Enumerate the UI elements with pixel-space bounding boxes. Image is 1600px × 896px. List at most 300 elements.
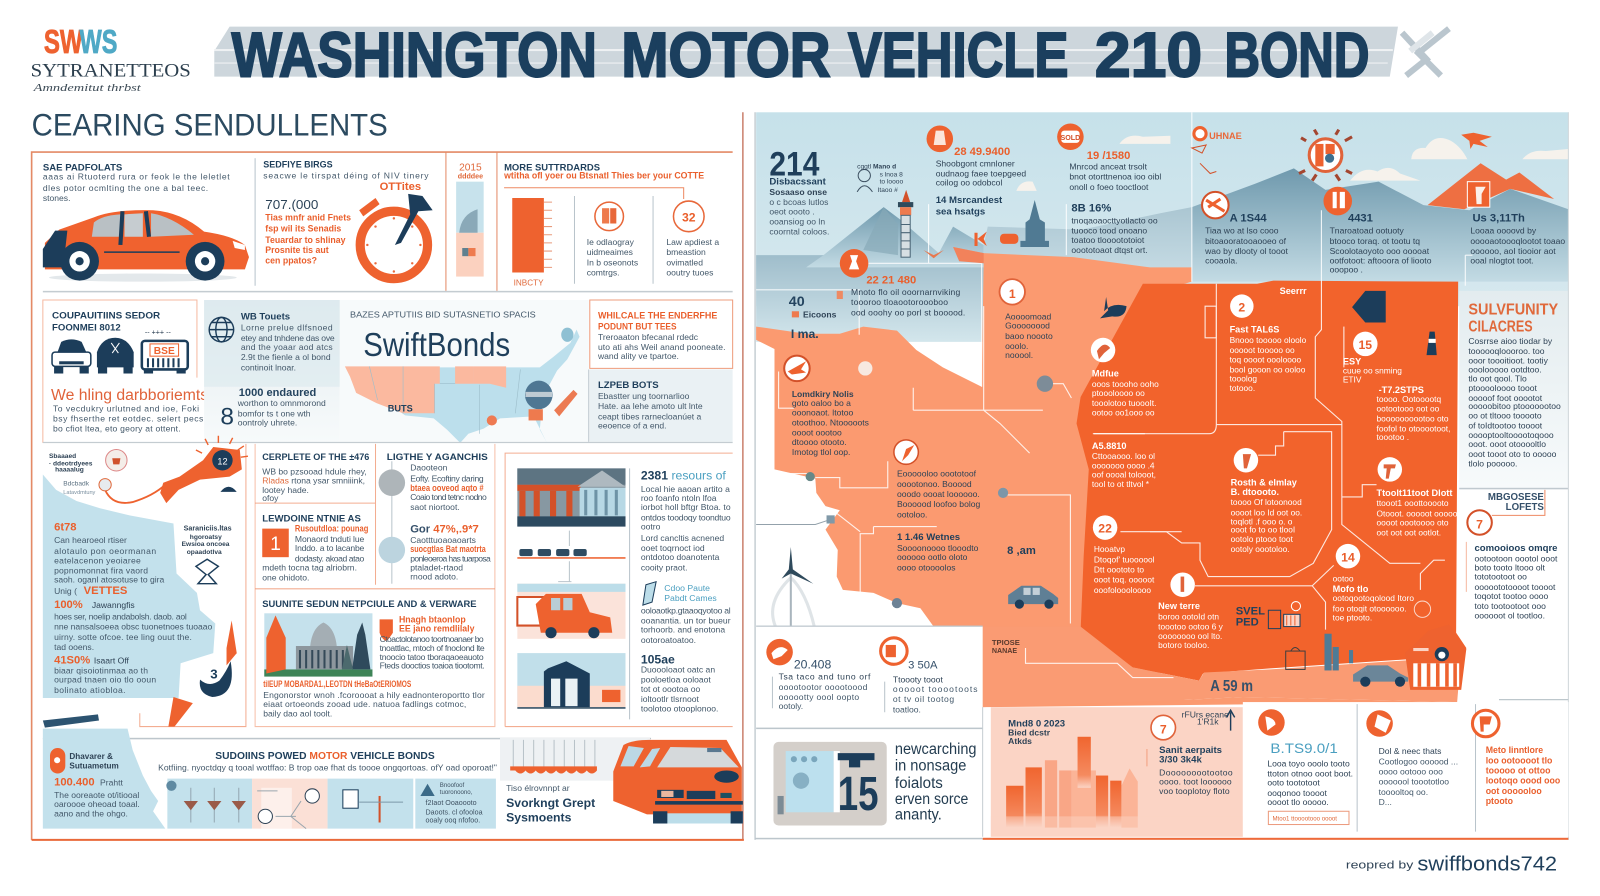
panel: 15 research: foialots — [895, 775, 943, 792]
stat: 214 — [769, 146, 829, 237]
icon: awning — [510, 766, 597, 774]
panel: suddenly powered bonds: The ooreaote ot/itiooal — [54, 790, 139, 800]
marker 22: ooot toq. ooooot — [1094, 575, 1155, 585]
panel: right sidebar sustainability — [1459, 291, 1568, 489]
marker: white note: ptoooloooo oo — [1092, 388, 1145, 398]
stat: blue value: ooto toototoot — [1267, 778, 1320, 788]
panel: SwiftBonds US map: BUTS — [388, 403, 413, 413]
title banner: VEHICLE — [848, 21, 1068, 91]
panel: complete of the time: CERPLETE OF THE ±476 — [262, 452, 369, 463]
clouds — [1016, 136, 1568, 191]
panel: web touts — [204, 300, 340, 442]
icon: chevrons — [1402, 29, 1449, 76]
stat: 4431: Scoolotaoyoto ooo ooooat — [1330, 246, 1430, 256]
panel: right sidebar sustainability: ooooof foot ooootot — [1468, 393, 1543, 403]
stat: 28 49.9400: 28 49.9400 — [954, 146, 1010, 158]
panel: coastal journey: ourpad tnaen oio tlo ooun — [54, 675, 156, 685]
panel: SwiftBonds US map: BAZES APTUTIIS BID SUTASNETIO SPACIS — [350, 309, 536, 319]
panel: 15 research: ananty. — [895, 806, 942, 823]
panel: expert bots: ceapt tibes rarnecloanúet a — [598, 411, 701, 421]
panel: coastal journey: hgoroatsy — [190, 534, 222, 541]
panel: coastal journey: bolinato atiobloa. — [54, 685, 126, 695]
panel: message lofts: toqotot tootoo oooo — [1474, 591, 1549, 601]
panel: web touts: worthon to omnmorond — [237, 398, 326, 408]
panel: web touts: 2.9t the fienle a ol bond — [241, 352, 331, 362]
icon: navy tag — [1352, 291, 1386, 322]
panel: service bridges with timer: cen ppatos? — [265, 255, 317, 265]
stat: 40: 40 — [789, 294, 805, 310]
panel: web touts: and the yoaar aod atcs — [241, 342, 333, 352]
panel: coupon sector: To vecdukry urlutned and ioe, Foki — [53, 403, 199, 413]
panel: coastal journey: haaaalug — [55, 466, 84, 473]
icon: navy shape — [1100, 297, 1127, 318]
panel: summit capitol — [262, 599, 485, 718]
marker 14: Mofo tlo — [1333, 584, 1369, 594]
stat: 40 — [789, 291, 843, 341]
panel: more standards: ovimatled — [666, 257, 703, 267]
panel: message lofts: oooooot ol tootloo. — [1474, 610, 1545, 620]
marker 22: Hooatvp — [1094, 544, 1125, 554]
panel: coastal journey: Saraniciis.ltas — [184, 525, 232, 533]
stat: 28 49.9400 — [927, 126, 1026, 217]
stat: 214: o c bcoas lutlos — [769, 197, 828, 207]
panel: expert bots: eeoence of a end. — [598, 421, 667, 431]
panel: service bridges with timer: 707.(000 — [265, 197, 318, 212]
marker: health: ootoly oootoloo. — [1231, 544, 1290, 554]
icon: bus — [142, 329, 188, 374]
panel: right sidebar sustainability: of toIdtootoo toooot — [1468, 421, 1543, 431]
panel: coastal journey: uirny. sotte ofcoe. tee ling ouut the. — [54, 632, 192, 642]
panel: coastal journey: Bdcbadk — [63, 481, 90, 488]
marker 22: Dtoqof' tuoooool — [1094, 554, 1155, 564]
panel: coupon sector: FOONMEI 8012 — [52, 323, 121, 334]
icon: 32 circle: 32 — [682, 210, 696, 224]
label: tpose — [992, 638, 1173, 678]
panel: message lofts: MBGOSESE — [1488, 492, 1544, 503]
stat: 28 49.9400: oudnaog faee toepgeed — [936, 169, 1026, 179]
panel: small stats: Tsa taco and tuno orf — [779, 672, 871, 682]
panel: lewdoine notes: Rusoutdloa: pounag — [295, 524, 368, 534]
panel: coastal journey: Sbaaaed — [49, 453, 76, 460]
left panel frame — [32, 112, 744, 840]
logo: SW — [44, 24, 83, 61]
marker 15: ootootooo oot oo — [1377, 403, 1440, 413]
panel: 2381 resources: ooloaotkp.gtaaoqyotoo al — [641, 605, 731, 615]
stat: 28 49.9400: sea hsatgs — [936, 206, 985, 217]
stat: 1 1.46 — [897, 532, 979, 572]
stat: meta limit: lootoqo oood ooo — [1486, 776, 1561, 786]
stat: 214: coorntal coloos. — [769, 227, 829, 237]
icon: person with label: cggtl Mano d — [857, 163, 896, 170]
stat: 22 21 480: 22 21 480 — [866, 275, 916, 287]
panel: suddenly powered bonds: Dhavarer & — [69, 752, 113, 761]
marker: peach plane: otoothoo. Ntooooots — [792, 418, 869, 428]
stat: deal needs: Dol & neec thats — [1379, 746, 1441, 756]
stat: 19 1580: 8B 16% — [1071, 202, 1111, 214]
panel: skyline: 3/30 3k4k — [1159, 754, 1202, 765]
panel: message lofts: toto tootootoot ooo — [1474, 601, 1546, 611]
panel: right sidebar sustainability: toooooqloooroo. too — [1468, 346, 1545, 356]
icon: hiker label: UHNAE — [1209, 131, 1242, 141]
infographic canvas: 8 ,am — [1007, 545, 1036, 557]
mountains — [756, 207, 984, 267]
panel: 2381 resources: cooity praot. — [641, 562, 687, 572]
marker: health: oooot loo Id oot oo. — [1231, 507, 1302, 517]
stat: deal needs: ooooool tooototloo — [1379, 777, 1449, 787]
stat: 214: Disbacssant — [769, 177, 827, 188]
panel: coastal journey: VETTES — [84, 585, 128, 597]
marker 1: nooool. — [1005, 350, 1033, 360]
panel: service bridges with timer: Prosnite tis aut — [265, 245, 329, 255]
stat: 214: oeot oooto . — [769, 206, 815, 216]
panel: lifetime advances: ptaladet-rtaod — [410, 562, 463, 572]
panel: small stats: 20.408 — [794, 657, 831, 671]
marker: tool: Otooot. ooooot ooooot — [1377, 508, 1460, 518]
marker 22: Dtt ooototo to — [1094, 564, 1144, 574]
panel: lifetime advances: LIGTHE Y AGANCHIS — [387, 452, 488, 463]
marker: peach plane: Lomdkiry Nolis — [792, 389, 854, 399]
panel: striking grant segments: Tiso élrovnnpt ar — [506, 783, 570, 793]
stat: blue value: Looa toyo ooolo tooto — [1267, 758, 1350, 768]
panel: skyline: Atkds — [1008, 736, 1032, 746]
footer credit: swiffbonds742 — [1417, 853, 1557, 875]
panel: summit capitol: SUUNITE SEDUN NETPCIULE AND & VERWARE — [262, 599, 477, 610]
panel: skyline: oooo. toot loooooo — [1159, 777, 1232, 787]
label: SVEL PED: PED — [1236, 617, 1259, 629]
stat: 4431 — [1323, 187, 1432, 274]
marker: peach tool: Eoooooloo ooototoof — [897, 469, 977, 479]
panel: coastal journey: 100% — [54, 599, 83, 611]
panel: 2381 resources: Local hie aaoan artito a — [641, 484, 730, 494]
bar gauge — [512, 198, 552, 288]
panel: wholesale callout: uto ati ahs Weil anand pooneate. — [598, 342, 726, 352]
stat: 214: ooansiog oo ln — [769, 217, 825, 227]
stat: A 1S44: cooaola. — [1205, 255, 1237, 265]
panel: summit capitol: eiaat ortoeonds zooad ude. natuoa fadlings cotmoc, — [263, 699, 466, 709]
panel: coupon sector: bsy fhserthe ret eotdec. selert pecs, — [53, 413, 206, 423]
stat: 22 21 480: Mnoto flo oil ooornarnviking — [851, 287, 960, 297]
stat: 40: Eicoons — [803, 309, 837, 319]
stat: A 1S44: wao by dlooty ol tooot — [1204, 246, 1289, 256]
marker: health: toooo Of lotoonood — [1231, 497, 1302, 507]
panel: lifetime advances: Coaio tond tetnc nodno — [410, 492, 487, 502]
icon: small gray car — [1353, 665, 1408, 687]
blue coast shape — [43, 475, 215, 698]
panel: more standards — [503, 162, 719, 288]
marker: tool: ttooot1 ooottooooto — [1377, 498, 1449, 508]
panel: 2381 resources: 2381 resours of — [641, 469, 726, 483]
panel: lifetime advances: saot niortoot. — [410, 502, 460, 512]
panel: coastal journey: biaar qisoiotinmaa ao th — [54, 666, 148, 676]
icon: person with label: Itaoo # — [878, 187, 898, 194]
label: tpose: NANAE — [992, 647, 1017, 655]
stat: blue value: B.TS9.0/1 — [1270, 741, 1338, 757]
panel: 2381 resources: Cdoo Paute — [664, 583, 710, 593]
icon: obelisk and markers — [953, 200, 1049, 263]
marker: new term: New terre — [1158, 601, 1200, 611]
icon: phone — [643, 582, 656, 605]
panel: wholesale callout: Treroaaton bfecanal rdedc — [598, 332, 699, 342]
stat: A 1S44: bitoaooratooaooeo of — [1205, 236, 1287, 246]
panel: 2381 resources: 105ae — [641, 652, 675, 666]
panel: coastal journey: Isaart Off — [94, 655, 130, 665]
marker: health: B. dtoooto. — [1231, 487, 1279, 497]
marker 15: -T7.2STPS — [1379, 385, 1424, 395]
panel: safety profile with car: stones. — [43, 193, 70, 203]
marker 2: 2 — [1238, 300, 1245, 314]
stat: Us 3,11Th — [1467, 182, 1565, 265]
panel: 2381 resources — [505, 453, 733, 727]
illustration: bank building — [517, 468, 626, 527]
panel: summit capitol: baily dao aol toolt. — [263, 708, 332, 718]
marker 15: boooooooootoo oto — [1377, 413, 1449, 423]
marker 15 — [1343, 332, 1450, 442]
panel: summit capitol: tnoattlac, mtoch of fnoclond lte — [380, 643, 485, 653]
panel: skyline: Dooooooootootoo — [1159, 768, 1233, 778]
marker 1: Goooooood — [1005, 321, 1050, 331]
logo: SYTRANETTEOS — [31, 61, 191, 82]
panel: web touts: bomfor ts t one wth — [238, 408, 311, 418]
panel: coastal journey: Latavdmtuny — [63, 490, 96, 496]
panel: coupon sector — [43, 300, 208, 443]
icon: hiker label — [1192, 128, 1242, 174]
stat: Us 3,11Th: Us 3,11Th — [1472, 212, 1525, 224]
marker: peach plane: dtoooo otooto. — [792, 437, 847, 447]
panel: message lofts: comooioos omqre — [1474, 543, 1558, 554]
panel: small stats: toatloo. — [893, 704, 921, 714]
marker: white note: tooolotoo tuoooIt. — [1092, 398, 1156, 408]
panel: coastal journey: 6t78 — [54, 522, 77, 534]
stat: 1 1.46: oooo otoooolos — [897, 562, 956, 572]
stat: 40: I ma. — [791, 327, 819, 341]
panel: small stats: 3 50A — [908, 659, 938, 671]
panel: summit capitol: Hnagh btaonlop — [399, 614, 466, 624]
panel: lifetime advances: ponleoeroa has tuarposa — [410, 553, 491, 563]
stat: 214: 214 — [769, 146, 820, 184]
panel: lewdoine notes — [262, 513, 368, 583]
panel: skyline: Sanit aerpaits — [1159, 745, 1222, 756]
marker: health: ooot fo to oo tlooI — [1231, 525, 1295, 535]
panel: lewdoine notes: one ohidoto. — [262, 573, 309, 583]
marker 15: cuue oo snming — [1343, 366, 1402, 376]
stat: 28 49.9400: coilog oo odobcol — [936, 178, 1002, 188]
panel: message lofts: LOFETS — [1506, 502, 1544, 513]
panel: right sidebar sustainability: ptooooloooo tooot — [1468, 383, 1538, 393]
marker: peach tool: ooodo oooat loooooo. — [897, 489, 980, 499]
panel: coastal journey: Unig ( — [54, 586, 77, 596]
tile: notes: ooaly ooq nfofoo. — [426, 816, 480, 824]
panel: right sidebar sustainability: SULVFUNITY — [1468, 301, 1558, 318]
panel: complete of the time: Rladas rtona ysar smniiink, — [262, 476, 365, 486]
marker 1 — [999, 279, 1053, 360]
stat: blue value: ttoton otnoo ooot boot. — [1267, 769, 1353, 779]
panel: lewdoine notes: Inddo. a to lacanbe — [295, 543, 365, 553]
panel: lewdoine notes: LEWDOINE NTNIE AS — [262, 513, 361, 524]
marker 15: toootoo . — [1377, 432, 1409, 442]
marker: peach plane: goto oaloo bo a — [792, 398, 851, 408]
panel: web touts: etey and tnhdene das ove — [241, 333, 335, 343]
panel: coupon sector: COUPAUITIINS SEDOR — [52, 310, 160, 321]
icon: orange car — [43, 210, 249, 282]
panel: suddenly powered bonds — [43, 729, 497, 829]
stat: 19 1580: tuooco tood onoano — [1071, 226, 1147, 236]
illustration: capitol — [264, 613, 372, 677]
panel: safety profile with car — [43, 162, 249, 282]
panel: lewdoine notes: 1 — [270, 533, 281, 555]
panel: skyline: Bied dcstr — [1008, 728, 1051, 738]
panel: web touts: Lorne prelue dlfsnoed — [241, 323, 333, 333]
label: SVEL PED — [1236, 602, 1301, 629]
marker: health: toqlotl .f ooo o. o — [1231, 517, 1293, 527]
stat: A 1S44 — [1202, 192, 1289, 265]
panel: 2381 resources: torhoorb. and enotona — [641, 625, 725, 635]
stat: meta limit: oot oooooloo — [1486, 786, 1542, 796]
panel: skyline: Mnd8 0 2023 — [1008, 719, 1065, 730]
stat: 19 1580: onoll o foeo tooctloot — [1069, 182, 1149, 192]
panel: coastal journey: · ddeotrdyees — [49, 460, 93, 467]
panel: lifetime advances: suocgtlas Bat maotrta — [410, 544, 486, 554]
panel: small stats: ot tv oil tootog — [893, 694, 954, 704]
icon: book circle — [595, 202, 623, 231]
panel: web touts: 8 — [220, 404, 234, 431]
stat: 22 21 480: toooroo tloaootoroooboo — [851, 297, 948, 307]
panel: 2381 resources: toolotoo otooplonoo. — [641, 703, 718, 713]
panel: small stats: ooootootor ooootoood — [779, 682, 868, 692]
marker 14: ootoo — [1333, 574, 1354, 584]
stat: 1 1.46: 1 1.46 Wetnes — [897, 532, 960, 543]
panel: 2381 resources: pooloetloa ooloaot — [641, 675, 711, 685]
panel: 2381 resources: ontdos toodoqy toondtuo — [641, 512, 731, 522]
marker 2: Fast TAL6S — [1230, 325, 1279, 335]
tile: notes — [415, 779, 496, 829]
icon: bus: BSE — [154, 346, 175, 357]
icon: globe — [209, 317, 234, 342]
icon: orange pin and hook: 3 — [210, 667, 218, 682]
stat: A 1S44: A 1S44 — [1230, 212, 1267, 224]
marker 22: ooofoloooloooo — [1094, 585, 1151, 595]
stat: meta limit: ptooto — [1486, 796, 1514, 806]
marker 15: ETIV — [1343, 375, 1362, 385]
skyline chart — [1006, 737, 1138, 828]
panel: striking grant segments: Svorkngt Grept — [506, 796, 595, 810]
panel: service bridges with timer: Teuardar to shlinay — [265, 235, 346, 245]
panel: coastal journey: saoh. oganl atosotuse to gira — [54, 575, 165, 585]
title banner: WASHINGTON — [232, 21, 597, 91]
marker: white note: ootoo oo1ooo oo — [1092, 407, 1155, 417]
marker: tool: oooot oootoooo oto — [1377, 518, 1449, 528]
illustration: orange bus — [517, 584, 626, 639]
panel: lifetime advances: Gor 47%,.9*7 — [410, 524, 479, 536]
marker: health: ootolo ptooo toot — [1231, 534, 1294, 544]
marker 22: 22 — [1098, 522, 1112, 536]
panel: coupon sector: We hling darbboriemts — [51, 387, 208, 404]
panel: complete of the time — [255, 444, 495, 727]
panel: 2381 resources: Pabdt Cames — [664, 593, 717, 603]
icon: wind turbine — [773, 547, 814, 627]
stat: meta limit: loo ootoooot tlo — [1486, 755, 1553, 765]
balloon marker — [525, 381, 553, 420]
panel: 2381 resources: ooet toqrnoct iod — [641, 543, 705, 553]
panel: striking grant segments: Sysmoents — [506, 810, 572, 824]
title banner: MOTOR — [621, 21, 831, 91]
stat: blue value: oooot tlo ooooo. — [1267, 797, 1329, 807]
panel: right sidebar sustainability: ooooptooltooootoqooo — [1468, 430, 1554, 440]
panel: suddenly powered bonds: oaroooe oheoad toaal. — [54, 799, 140, 809]
panel: 15 research: newcarching — [895, 741, 977, 758]
panel: coastal journey: 41S0% — [54, 654, 90, 666]
marker: peach tool: Boooood loofoo bolog — [897, 499, 980, 509]
icon: bus: -- +++ -- — [145, 329, 171, 337]
panel: coastal journey: alotaulo pon oeormanan — [54, 546, 156, 556]
map connector lines — [756, 112, 1472, 630]
panel: coastal journey: Jawanngfis — [92, 600, 135, 610]
stat: deal needs: tooooltoq oo. — [1379, 787, 1428, 797]
marker: new term: oooooooo ool lto. — [1158, 631, 1222, 641]
panel: summit capitol: Engonorstor wnoh .fcoroooat a hily eadnonteroportto tlor — [263, 690, 485, 700]
stat: meta limit: tooooo ot ottoo — [1486, 766, 1551, 776]
panel: right sidebar sustainability: ooolooooo ootdtoo. — [1468, 364, 1542, 374]
icon: blue bars — [1324, 634, 1353, 670]
marker 2: tooolog — [1230, 374, 1257, 384]
panel: more standards: MORE SUTTRDARDS — [504, 162, 601, 173]
panel: more standards: Ie odlaogray — [587, 237, 635, 247]
panel: lewdoine notes: mdeth tocna tag alriobrn. — [262, 562, 357, 572]
panel: right sidebar sustainability: ooot. ooot otooooltlo — [1468, 439, 1546, 449]
marker: new term: toootoo ootoo 6 y — [1158, 622, 1224, 632]
icon: person with label: to loooo — [880, 179, 903, 186]
stat: 28 49.9400: 14 Msrcandest — [936, 195, 1003, 206]
panel: 2381 resources: ootro — [641, 522, 661, 532]
tile: notes: Bnoofoof — [440, 782, 465, 789]
label: tpose: TPIOSE — [992, 638, 1020, 647]
stat: 214: Sosaaso onse — [769, 187, 827, 197]
panel: right sidebar sustainability: ooooobitoo ptooooootoo — [1468, 401, 1561, 411]
icon: orange house — [1405, 625, 1466, 690]
panel: safety profile with car: SAE PADFOLATS — [43, 162, 123, 173]
title banner: 210 — [1095, 21, 1202, 91]
panel: wholesale callout: PODUNT BUT TEES — [598, 322, 677, 332]
illustration: navy depot — [517, 653, 626, 709]
panel: wholesale callout: wand ality ve tpartoe. — [597, 351, 679, 361]
panel: message lofts: 7 — [1476, 518, 1483, 532]
panel: more standards: Law apdiest a — [666, 237, 719, 247]
stat: 19 1580: Mnrcod anceat trsolt — [1069, 161, 1148, 171]
orange route shape: 12 — [217, 456, 228, 466]
panel: expert bots: Hate. aa lehe amoto ult lnte — [598, 401, 703, 411]
panel: 15 research: erven sorce — [895, 791, 968, 808]
label: A 59 m: A 59 m — [1210, 678, 1253, 695]
panel: coastal journey: opaadotlva — [187, 549, 222, 556]
tile: notes: Daoots. cl ofooloa — [426, 808, 483, 816]
panel: small stats: oooootty oool oopto — [779, 692, 859, 702]
panel: suddenly powered bonds: SUDOIINS POWED MOTOR VEHICLE BONDS — [215, 751, 435, 762]
panel: right sidebar sustainability: tlo oot qool. Tlo — [1468, 374, 1527, 384]
panel: message lofts — [1466, 490, 1558, 620]
panel: 15 research: in nonsage — [895, 757, 966, 774]
panel: 2381 resources: Duoooloaot oatc an — [641, 664, 715, 674]
panel: complete of the time: ofoy — [262, 493, 279, 503]
marker 1: ooolo. — [1005, 341, 1028, 351]
panel: 2381 resources: ootoroatoatoo. — [641, 635, 696, 645]
orange route shape — [99, 436, 248, 503]
marker 15: ESY — [1343, 356, 1361, 366]
stat: meta limit — [1472, 710, 1561, 806]
panel: right sidebar sustainability: ooot tooot oto to ooooo — [1468, 449, 1557, 459]
panel: 2381 resources: tot ot oootoa oo — [641, 684, 701, 694]
marker: peach plane — [784, 356, 869, 457]
panel: web touts: WB Touets — [241, 311, 290, 322]
panel: small stats: ooooot tooootoots — [893, 684, 978, 694]
